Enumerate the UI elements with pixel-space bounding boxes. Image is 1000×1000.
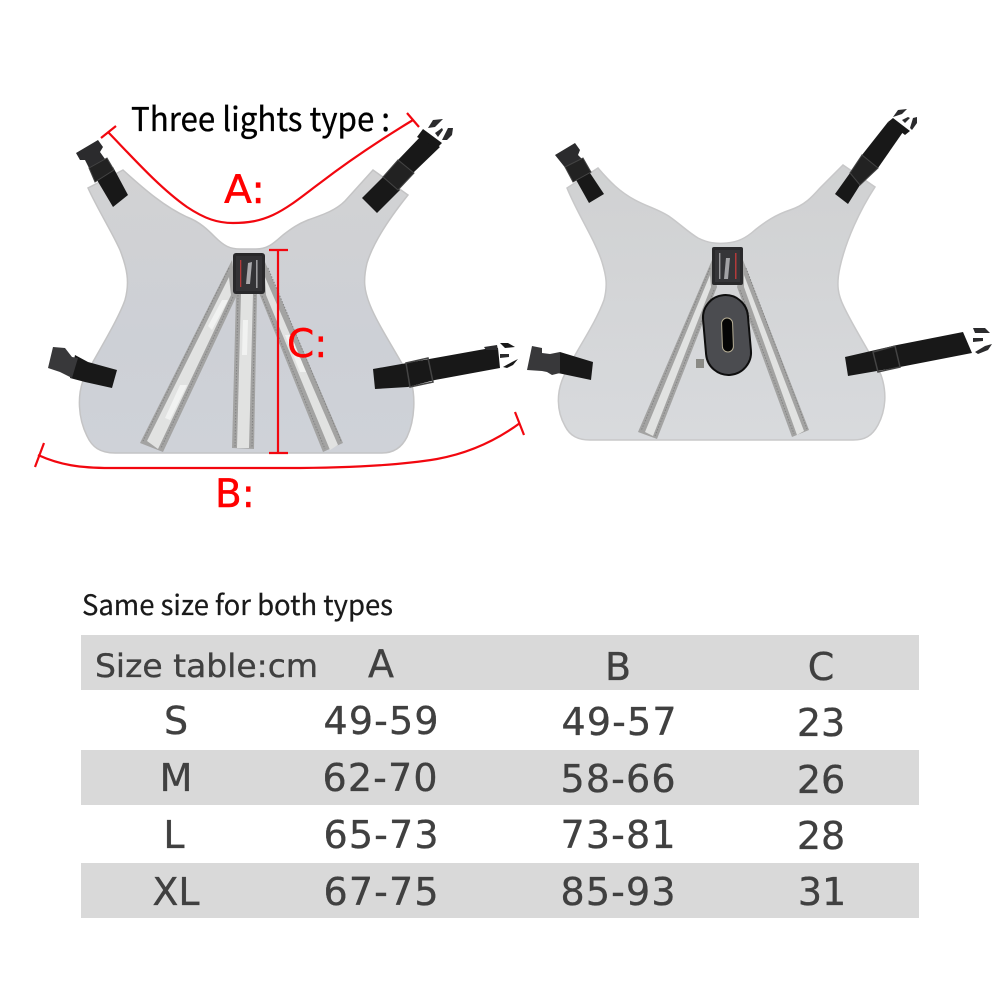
label C: C: [287, 322, 327, 367]
row S [164, 699, 845, 745]
row S: S [164, 699, 188, 743]
label A: A: [224, 168, 265, 213]
strap top right [362, 119, 453, 213]
row L: 73-81 [560, 813, 676, 857]
strap side left [527, 346, 593, 380]
table header: C [808, 645, 834, 689]
label B: B: [215, 472, 255, 517]
title: Three lights type : [131, 93, 390, 141]
vest body right [558, 165, 885, 440]
row XL: 67-75 [324, 870, 438, 914]
note: same size: Same size for both types [82, 584, 393, 624]
row L [163, 813, 845, 858]
strap top right [835, 109, 917, 204]
light module [712, 247, 743, 285]
row M: 58-66 [560, 757, 676, 801]
table header: A [368, 642, 394, 686]
reflective strip right [259, 262, 343, 452]
dimension C [269, 250, 327, 453]
row S: 49-57 [562, 700, 676, 744]
table row backgrounds [81, 635, 919, 918]
row XL: XL [152, 870, 200, 914]
row XL: 31 [798, 870, 846, 914]
dimension A [101, 113, 419, 223]
row XL: 85-93 [560, 870, 676, 914]
row S: 49-59 [324, 699, 438, 743]
size table [81, 635, 919, 918]
row M: M [160, 756, 192, 800]
table header: B [605, 645, 631, 689]
strap top left [76, 140, 128, 207]
left vest: three lights type [48, 119, 518, 453]
strap side right [845, 328, 992, 376]
reflective strip left [638, 260, 717, 439]
strap side left [48, 347, 117, 388]
right vest: with pouch [527, 109, 992, 440]
light module [233, 253, 265, 294]
row M: 26 [797, 758, 845, 802]
row XL [152, 870, 846, 914]
reflective strip right [737, 260, 809, 437]
zipper pouch [696, 293, 753, 377]
row S: 23 [797, 701, 845, 745]
dimension B [35, 412, 524, 517]
reflective strip left [140, 260, 237, 452]
reflective strip centre [232, 293, 257, 449]
row M: 62-70 [322, 756, 438, 800]
row L: L [163, 813, 185, 857]
table header: Size table:cm [95, 647, 318, 685]
row M [160, 756, 845, 802]
row L: 28 [797, 814, 845, 858]
strap top left [555, 143, 604, 203]
vest body left [79, 170, 414, 453]
table header [95, 642, 834, 689]
strap side right [373, 343, 518, 389]
row L: 65-73 [324, 813, 438, 857]
